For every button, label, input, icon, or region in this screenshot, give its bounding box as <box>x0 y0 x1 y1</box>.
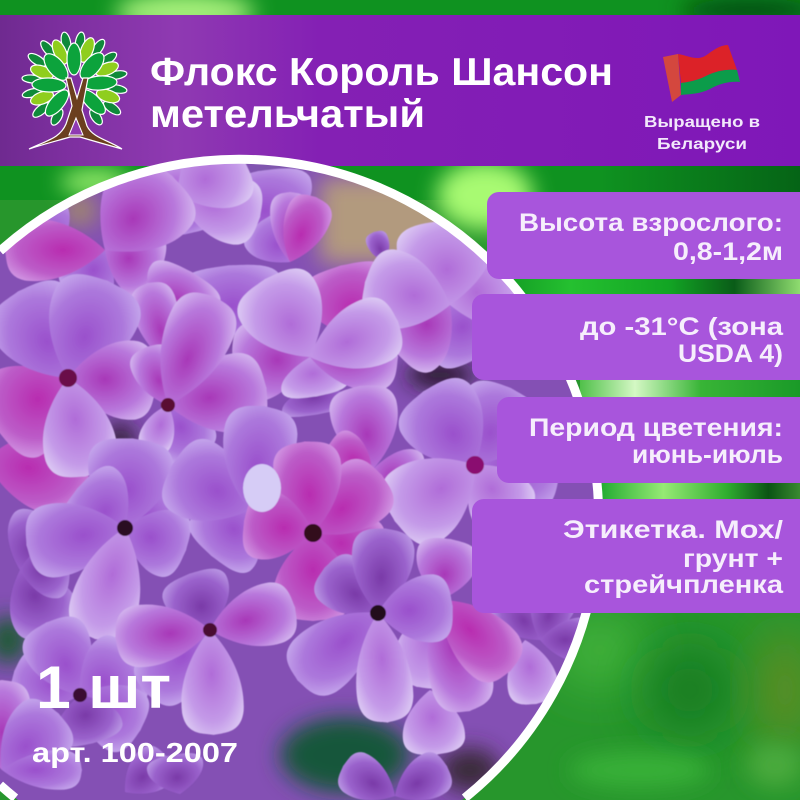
pale curled petal <box>243 464 281 512</box>
flower: top centre pale <box>166 164 263 246</box>
flower: bottom edge left <box>0 680 458 800</box>
flower: magenta at left edge <box>0 443 89 639</box>
card: packaging: Этикетка. Мох/ <box>563 516 783 544</box>
white circle ring <box>0 159 599 798</box>
card: height: 0,8-1,2м <box>673 238 783 266</box>
flower: top left pink <box>5 172 196 296</box>
flower: centre vivid magenta <box>238 438 404 621</box>
title <box>150 51 613 136</box>
flag ornament <box>663 54 681 102</box>
flower: second left <box>130 292 268 464</box>
flower: top middle magenta <box>244 168 390 263</box>
quantity label: 1 шт <box>36 654 171 721</box>
flower: centre curled <box>317 381 431 519</box>
title: метельчатый <box>150 93 425 136</box>
flag green field <box>681 70 740 95</box>
card: packaging <box>472 499 800 613</box>
flower: bottom right lavender <box>276 526 456 725</box>
card: blooming period: июнь-июль <box>632 441 783 469</box>
origin label <box>644 114 760 153</box>
card: packaging: стрейчпленка <box>584 571 784 599</box>
dark gaps between flowers <box>106 338 484 440</box>
card: frost hardiness: до -31°C (зона <box>580 313 784 341</box>
flower: right lavender <box>384 377 558 544</box>
card: height: Высота взрослого: <box>519 209 783 237</box>
photo of phlox flowers in a circle <box>0 123 610 800</box>
flower: upper right pale <box>312 222 514 374</box>
dark green foliage <box>0 616 500 793</box>
strip between cards 1 and 2 <box>514 279 800 294</box>
flag red field <box>678 45 737 83</box>
flower: lower left lavender <box>25 438 191 640</box>
strip between cards 3 and 4 <box>590 483 800 499</box>
card: frost hardiness <box>472 294 800 380</box>
trunk opening <box>69 118 83 135</box>
strip between cards 2 and 3 <box>580 380 800 397</box>
header band <box>0 15 800 166</box>
tree trunk <box>29 78 122 149</box>
flower: right lower pink <box>387 534 600 757</box>
card: blooming period <box>497 397 800 483</box>
flower: left large <box>0 264 157 483</box>
origin label: Беларуси <box>657 136 747 153</box>
flag of Belarus <box>663 45 740 102</box>
title: Флокс Король Шансон <box>150 51 613 94</box>
logo: tree <box>21 31 128 149</box>
card: packaging: грунт + <box>683 545 783 573</box>
flower: centre top of pair <box>162 406 298 574</box>
flower: centre right of top <box>132 260 403 418</box>
card: blooming period: Период цветения: <box>529 414 783 442</box>
blurred wooden fence <box>65 165 470 263</box>
tree leaves <box>21 31 128 127</box>
flower: bottom left lavender <box>11 616 150 753</box>
card: frost hardiness: USDA 4) <box>678 340 783 368</box>
origin label: Выращено в <box>644 114 760 131</box>
card: height <box>487 192 800 279</box>
article number: арт. 100-2007 <box>32 737 238 768</box>
flower: bottom middle pink <box>113 562 303 736</box>
